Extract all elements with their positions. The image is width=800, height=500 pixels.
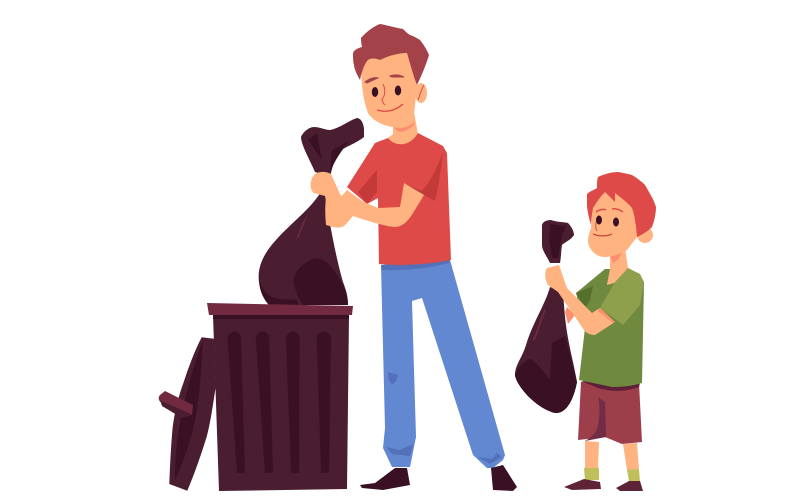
father's ear <box>415 83 427 103</box>
father's trash bag body <box>259 190 348 305</box>
son's legs <box>564 441 643 491</box>
bag knot shading <box>308 133 349 172</box>
eyes <box>372 87 378 97</box>
father's neck <box>388 112 418 148</box>
son's face <box>588 188 637 257</box>
lid handle <box>159 391 193 415</box>
son's arm <box>545 265 615 335</box>
can ribs <box>228 332 245 473</box>
eyes <box>596 216 602 224</box>
smile <box>593 234 612 236</box>
son's hair <box>587 172 656 237</box>
father's pants <box>381 260 505 468</box>
trash can lid <box>159 337 216 491</box>
father's hair <box>353 24 429 85</box>
shoes <box>564 479 601 490</box>
brows <box>365 78 378 83</box>
father's ear detail <box>418 85 424 100</box>
son's shirt <box>576 268 644 387</box>
father's shirt <box>347 133 451 265</box>
father's face <box>361 50 417 127</box>
son's bag body <box>515 287 577 413</box>
father's right shoe <box>491 465 517 491</box>
brows <box>596 209 606 212</box>
son's shorts <box>578 381 642 444</box>
nose mark <box>596 222 597 231</box>
father's hand and forearm <box>311 172 354 219</box>
nose <box>382 84 385 105</box>
father's left shoe <box>360 468 410 490</box>
son's bag knot <box>542 220 574 263</box>
socks <box>584 468 599 480</box>
son's neck shadow <box>610 252 622 263</box>
father's arm <box>325 183 424 228</box>
can rim <box>207 303 353 315</box>
trash can body <box>207 303 353 491</box>
son's neck <box>607 248 628 285</box>
bag neck and knot <box>301 118 364 177</box>
son's sleeve shadow on arm <box>598 308 615 323</box>
neck shadow <box>393 122 414 132</box>
smile <box>377 104 403 111</box>
son's ear <box>637 227 653 243</box>
son's back forearm <box>565 307 575 324</box>
son's bag knot shading <box>549 224 566 258</box>
